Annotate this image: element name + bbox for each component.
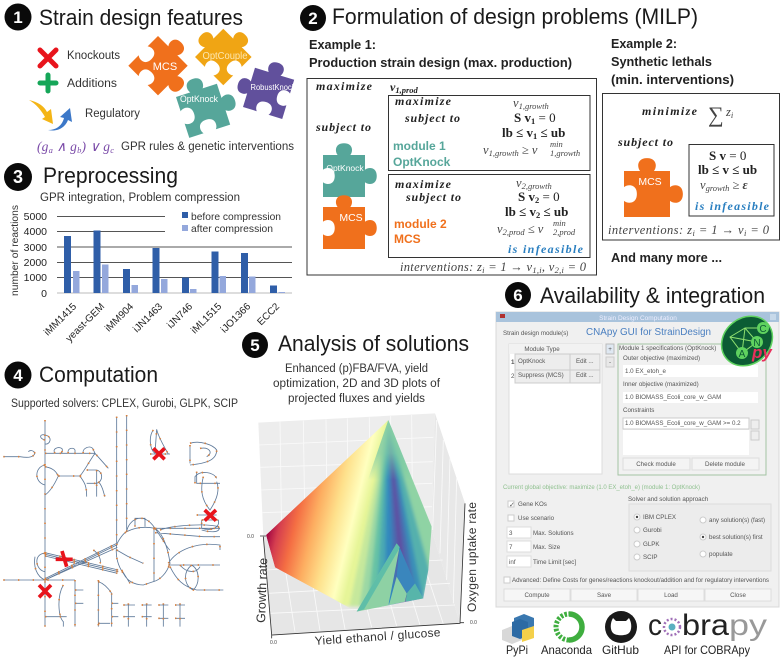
example 2 title — [611, 37, 734, 87]
add and remove buttons: - — [609, 359, 611, 366]
label: GPR rules: GPR rules & genetic interventions — [121, 141, 294, 153]
box: module 2: v — [497, 222, 503, 236]
number badge 3: 3 — [13, 167, 23, 187]
puzzle: OptCouple: OptCouple — [202, 51, 248, 62]
heading: availability: Availability & integration — [540, 283, 765, 308]
logo: GitHub — [602, 611, 639, 657]
axis tick labels: 0.0 — [270, 640, 277, 646]
module table: 1 — [511, 359, 515, 366]
solver selection: best solution(s) first — [709, 534, 763, 541]
action buttons: Compute — [524, 592, 550, 599]
solver list: Supported solvers: CPLEX, Gurobi, GLPK, SCIP — [11, 398, 238, 410]
icon: knockout cross — [40, 50, 56, 66]
plot axes — [260, 503, 465, 638]
advanced option: Advanced: Define Costs for genes/reactions knockout/addition and for regulatory interventions — [512, 577, 769, 584]
box: module 2: is infeasible — [508, 242, 584, 256]
panel: strain design features — [4, 4, 298, 155]
number badge 3 — [4, 163, 32, 191]
CNApy logo: C — [759, 324, 767, 335]
legend — [182, 211, 281, 235]
puzzle: OptCouple — [187, 13, 259, 85]
puzzle: RobustKnock: RobustKnock — [250, 83, 296, 92]
box: module 2: ≤ ub — [540, 204, 568, 219]
logo: Anaconda: Anaconda — [541, 643, 592, 657]
y axis ticks: 0 — [41, 288, 47, 300]
box: example 2 constraints: lb ≤ v ≤ ub — [698, 162, 757, 177]
box: example 1 outer problem: = 0 — [564, 260, 587, 274]
module specifications: Delete module — [705, 461, 746, 468]
box: module 2: = 0 — [539, 189, 560, 204]
logo: cobrapy: API for COBRApy — [664, 643, 750, 657]
box: example 2 problem: = 0 — [747, 223, 770, 237]
module specifications: Outer objective (maximized) — [623, 355, 700, 362]
category labels: yeast-GEM — [64, 301, 107, 344]
puzzle: MCS — [128, 28, 204, 104]
heading: preprocessing: Preprocessing — [43, 163, 178, 188]
note: and many more: And many more ... — [611, 251, 722, 265]
box: module 2: ≤ v — [525, 222, 544, 236]
panel: analysis of solutions — [242, 331, 479, 648]
axis label: growth rate: Growth rate — [254, 558, 270, 623]
icon: regulatory arrows — [29, 100, 72, 131]
box: module 2: 2,prod — [553, 227, 576, 237]
box: example 2 problem: ∑ — [708, 102, 724, 127]
logo: PyPi: PyPi — [506, 643, 528, 657]
box: module 2: 2,growth — [522, 181, 552, 191]
box: example 1 outer problem: v — [390, 80, 395, 94]
axis tick labels: 0.0 — [470, 620, 477, 626]
box: module 1: 1,growth — [550, 148, 580, 158]
bars: before compression — [64, 230, 277, 293]
box: example 2 constraints: ε — [742, 178, 748, 192]
box: module 2: S v — [518, 189, 535, 204]
module specifications: Check module — [636, 461, 676, 468]
GPR formula: ∧ g — [53, 139, 77, 154]
box: module 2: maximize — [395, 177, 452, 191]
action buttons: Close — [730, 592, 746, 599]
module specifications: 1.0 EX_etoh_e — [625, 368, 666, 375]
action buttons — [504, 589, 771, 601]
box: example 1 outer problem: 1,prod — [395, 85, 419, 95]
surface — [266, 420, 435, 612]
solver selection: any solution(s) (fast) — [709, 517, 765, 524]
number badge 6 — [505, 282, 531, 308]
bars: after compression — [73, 264, 285, 293]
box: example 1 outer problem: maximize — [316, 79, 373, 93]
panel: MILP formulation — [300, 4, 780, 275]
panel: computation — [3, 362, 238, 627]
solver selection: Gurobi — [643, 527, 662, 534]
logo: Anaconda — [541, 614, 592, 657]
module specifications — [618, 344, 766, 475]
box: example 2 constraints — [689, 144, 774, 216]
box: module 1: v — [483, 143, 489, 157]
logo: cobrapy: c — [648, 609, 662, 642]
GPR formula: c — [110, 145, 114, 155]
solver selection: SCIP — [643, 554, 657, 561]
legend: before compression — [191, 211, 281, 223]
red cross marks — [39, 448, 216, 597]
y axis ticks — [24, 211, 47, 300]
options: ✓ — [509, 502, 515, 509]
surface fold — [357, 543, 423, 612]
axis tick labels: 0.0 — [247, 534, 254, 540]
solver selection: Solver and solution approach — [628, 496, 709, 503]
y axis ticks: 1000 — [24, 272, 47, 284]
box: module 1: 1,growth — [519, 101, 549, 111]
puzzle: MCS module — [323, 195, 377, 249]
heading: formulation: Formulation of design problems (MILP) — [332, 4, 698, 29]
box: module 1: ≤ ub — [537, 125, 565, 140]
label: regulatory: Regulatory — [85, 108, 140, 120]
number badge 2: 2 — [308, 9, 318, 28]
example 1 title — [309, 38, 572, 70]
global objective: Current global objective: maximize (1.0 EX_etoh_e) (module 1: OptKnock) — [503, 485, 700, 491]
category labels: iJN1463 — [131, 301, 165, 335]
number badge 5: 5 — [250, 336, 260, 355]
legend: after compression — [191, 223, 273, 235]
module specifications: 1.0 BIOMASS_Ecoli_core_w_GAM — [625, 394, 721, 401]
number badge 1: 1 — [13, 8, 23, 27]
heading: computation: Computation — [39, 362, 158, 387]
module table: Edit ... — [576, 358, 594, 365]
box: example 2 problem: subject to — [617, 135, 673, 149]
box: module 1: 1 — [531, 116, 535, 126]
box: example 2 constraints: is infeasible — [695, 199, 770, 213]
box: example 2 constraints: v — [700, 178, 706, 192]
label: additions: Additions — [67, 78, 117, 90]
heading: analysis of solutions: Analysis of solutions — [278, 331, 469, 356]
puzzle: OptKnock module: OptKnock — [326, 163, 364, 173]
box: module 2 — [388, 174, 590, 258]
3D surface plot — [247, 413, 479, 648]
box: example 2 problem: i — [731, 110, 734, 120]
module specifications: Constraints — [623, 407, 654, 414]
y axis ticks: 5000 — [24, 211, 47, 223]
box: example 2 constraints: ≥ — [729, 178, 742, 192]
GPR formula: (g — [37, 139, 48, 154]
GUI title bar: Strain Design Computation — [599, 315, 677, 322]
category labels: iJN746 — [165, 301, 195, 331]
example 1 title: Production strain design (max. production) — [309, 56, 572, 70]
box: module 1: subject to — [404, 111, 460, 125]
number badge 6: 6 — [513, 286, 523, 305]
category labels: iJO1366 — [219, 301, 253, 335]
options: Max. Size — [533, 544, 561, 551]
puzzle: MCS example 2 — [624, 158, 683, 217]
add and remove buttons — [606, 344, 614, 367]
module table: OptKnock — [518, 358, 546, 365]
puzzle: MCS example 2: MCS — [638, 176, 662, 188]
box: module 1: 1,growth — [489, 148, 519, 158]
box: module 1: ≥ v — [519, 143, 538, 157]
panel: availability and integration — [496, 282, 782, 657]
box: example 1 outer problem: = 1 → v — [485, 260, 532, 274]
box: module 2: 2 — [535, 195, 539, 205]
box: example 2 problem: i — [744, 228, 747, 238]
subheading: GPR integration, Problem compression — [40, 192, 240, 204]
module table: 2 — [511, 373, 515, 380]
options: 7 — [509, 544, 513, 551]
number badge 4: 4 — [13, 366, 23, 385]
GPR formula: a — [49, 145, 53, 155]
options — [507, 501, 576, 567]
action buttons: Save — [597, 592, 612, 599]
description: optimization, 2D and 3D plots of — [273, 378, 441, 390]
module table: Suppress (MCS) — [518, 372, 564, 379]
y axis title: number of reactions — [10, 205, 21, 296]
box: example 2 problem: = 1 → v — [695, 223, 744, 237]
box: module 1: lb ≤ v — [502, 125, 533, 140]
box: example 1 outer problem: , v — [542, 260, 555, 274]
box: module 2: module 2 — [394, 217, 447, 231]
box: module 1: module 1 — [393, 139, 446, 153]
number badge 2 — [300, 5, 326, 31]
box: example 2 problem: interventions: z — [608, 223, 692, 237]
icon: addition plus — [40, 75, 56, 91]
box: module 2: 2,prod — [503, 227, 525, 237]
options: Time Limit [sec] — [533, 559, 576, 566]
heading: strain design features: Strain design features — [39, 5, 243, 30]
label: knockouts: Knockouts — [67, 50, 120, 62]
CNApy logo: py — [751, 343, 773, 362]
puzzle: MCS module: MCS — [339, 212, 363, 224]
category labels — [42, 301, 282, 344]
options: 3 — [509, 530, 513, 537]
box: example 1 outer problem: 2,i — [555, 265, 565, 275]
solver selection — [628, 496, 771, 571]
options: inf — [509, 559, 516, 566]
CNApy logo: N — [753, 338, 761, 349]
box: module 2: MCS — [394, 232, 421, 246]
box: example 1 outer problem: interventions: z — [400, 260, 482, 274]
box: example 1 outer problem: subject to — [315, 120, 371, 134]
puzzle: OptKnock — [172, 69, 242, 138]
y axis ticks: 2000 — [24, 257, 47, 269]
example 2 title: Synthetic lethals — [611, 55, 712, 69]
module table: Edit ... — [576, 372, 594, 379]
puzzle: OptKnock module — [323, 143, 377, 197]
example 1 title: Example 1: — [309, 38, 376, 52]
number badge 4 — [4, 362, 32, 388]
puzzle: OptKnock: OptKnock — [180, 94, 218, 104]
box: example 2 problem: minimize — [642, 104, 698, 118]
box: example 2 constraints: S v = 0 — [709, 148, 746, 163]
category labels: iML1515 — [189, 301, 224, 336]
description — [273, 363, 441, 405]
category labels: iMM1415 — [42, 301, 79, 338]
axis label: oxygen uptake: Oxygen uptake rate — [465, 502, 479, 612]
module table — [509, 344, 602, 474]
GPR formula: b — [77, 145, 81, 155]
box: module 1: = 0 — [535, 110, 556, 125]
number badge 5 — [242, 332, 268, 358]
puzzle: MCS: MCS — [153, 61, 177, 73]
box: module 2: subject to — [405, 190, 461, 204]
y axis ticks: 4000 — [24, 226, 47, 238]
box: module 1: OptKnock — [393, 155, 451, 169]
number badge 1 — [4, 4, 32, 30]
box: module 1: 1 — [533, 131, 537, 141]
plot walls — [258, 413, 465, 635]
box: module 1: S v — [514, 110, 531, 125]
box: module 1: maximize — [395, 94, 452, 108]
box: example 2 problem — [602, 94, 780, 240]
bar chart — [10, 205, 292, 344]
box: example 1 outer problem — [307, 78, 596, 275]
box: module 1: min — [550, 139, 563, 149]
logo: PyPi — [502, 614, 534, 657]
axis tick labels — [247, 534, 477, 646]
box: example 1 outer problem: i — [482, 265, 485, 275]
y axis ticks: 3000 — [24, 242, 47, 254]
category labels: iMM904 — [103, 301, 136, 334]
example 2 title: (min. interventions) — [611, 73, 734, 87]
module specifications: Inner objective (maximized) — [623, 381, 699, 388]
description: Enhanced (p)FBA/FVA, yield — [285, 363, 428, 375]
action buttons: Load — [664, 592, 678, 599]
add and remove buttons: + — [608, 346, 612, 353]
GUI title bar — [496, 312, 779, 322]
axis label: yield: Yield ethanol / glucose — [314, 625, 441, 648]
example 2 title: Example 2: — [611, 37, 677, 51]
solver selection: GLPK — [643, 541, 660, 548]
logo: cobrapy — [648, 609, 767, 657]
options: Gene KOs — [518, 501, 547, 508]
box: module 2: v — [516, 176, 522, 190]
GUI screenshot: Strain design module(s) — [503, 330, 568, 337]
box: example 2 problem: z — [726, 105, 731, 119]
box: module 2: min — [553, 218, 566, 228]
box: module 2: 2 — [536, 210, 540, 220]
metabolic network map — [3, 415, 223, 627]
module table: Module Type — [524, 346, 560, 353]
box: example 1 outer problem: 1,i — [532, 265, 542, 275]
solver selection: IBM CPLEX — [643, 514, 676, 521]
puzzle: RobustKnock — [232, 53, 298, 119]
solver selection: populate — [709, 551, 733, 558]
module specifications: Module 1 specifications (OptKnock) — [619, 345, 716, 352]
logo: cobrapy: bra — [682, 609, 729, 642]
options: Use scenario — [518, 515, 555, 522]
logo: cobrapy: py — [729, 609, 767, 642]
CNApy logo: A — [739, 349, 746, 360]
box: module 1: v — [513, 96, 519, 110]
module specifications: 1.0 BIOMASS_Ecoli_core_w_GAM >= 0.2 — [625, 420, 741, 427]
box: module 2: lb ≤ v — [505, 204, 536, 219]
CNApy logo — [712, 306, 782, 376]
logo: GitHub: GitHub — [602, 643, 639, 657]
panel: preprocessing — [4, 163, 292, 344]
box: example 2 problem: i — [692, 228, 695, 238]
GUI caption: CNApy GUI for StrainDesign — [586, 327, 711, 338]
box: module 1 — [388, 94, 590, 170]
GUI screenshot — [496, 306, 782, 607]
description: projected fluxes and yields — [288, 393, 425, 405]
options: Max. Solutions — [533, 530, 574, 537]
box: example 2 constraints: growth — [706, 183, 729, 193]
GPR formula: ) ∨ g — [80, 139, 110, 154]
category labels: ECC2 — [255, 301, 282, 328]
